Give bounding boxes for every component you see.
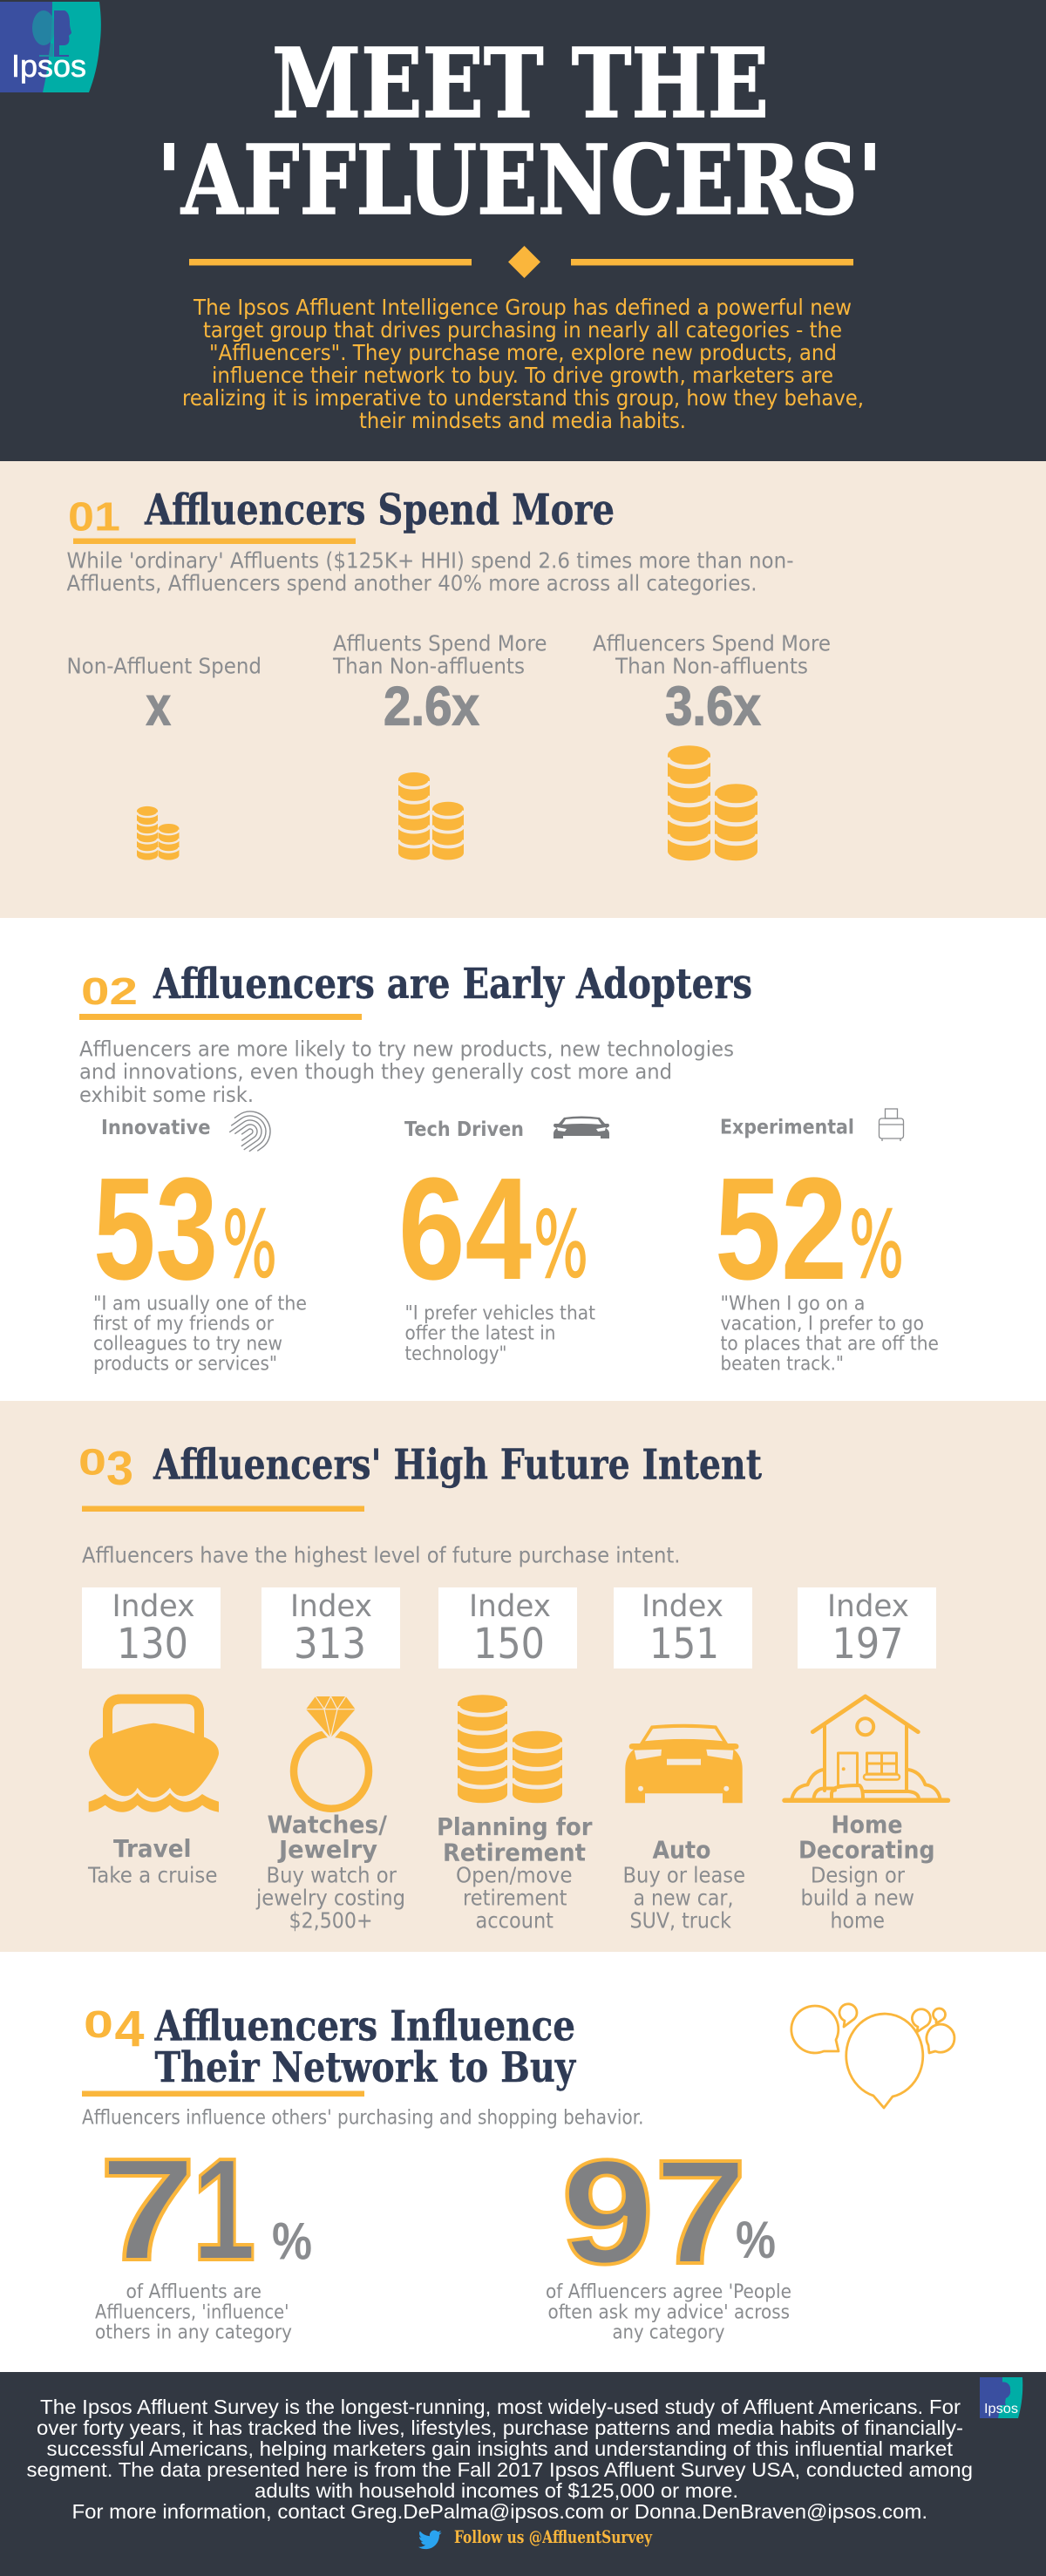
index box: jewelry (262, 1587, 400, 1669)
index box: travel: Index (112, 1589, 195, 1624)
stat: 71 percent: Affluencers, 'influence' (95, 2301, 289, 2324)
category label: watches and jewelry: $2,500+ (289, 1907, 373, 1934)
index box: home: Index (827, 1589, 909, 1624)
panel: 03 future intent (0, 1401, 1046, 1952)
stat: experimental: "When I go on a (720, 1294, 865, 1315)
footer text: For more information, contact Greg.DePalma@ipsos.com or Donna.DenBraven@ipsos.com. (71, 2500, 927, 2523)
title (157, 27, 882, 236)
column: affluents spend: Than Non-affluents (332, 654, 525, 678)
title: 'AFFLUENCERS' (157, 124, 882, 236)
description 01: While 'ordinary' Affluents ($125K+ HHI) spend 2.6 times more than non- (66, 547, 793, 574)
column: non-affluent spend: Non-Affluent Spend (66, 654, 262, 678)
category label: watches and jewelry: Watches/ (267, 1810, 388, 1839)
section number 04: 0 (84, 2003, 113, 2046)
category label: retirement: Retirement (443, 1838, 586, 1867)
panel: footer (0, 2372, 1046, 2576)
icon: house (784, 1696, 948, 1800)
panel: header (0, 0, 1046, 461)
footer text: The Ipsos Affluent Survey is the longest-running, most widely-used study of Affluent Americans. For (40, 2396, 961, 2418)
description 01: Affluents, Affluencers spend another 40% more across all categories. (66, 570, 757, 596)
stat: innovative: first of my friends or (93, 1313, 275, 1336)
title: MEET THE (272, 27, 769, 139)
heading underline 03 (82, 1506, 364, 1512)
heading 01: Affluencers Spend More (144, 485, 615, 535)
stat: 97 percent: often ask my advice' across (547, 2301, 790, 2324)
category label: auto (622, 1836, 745, 1934)
description 01 (66, 547, 793, 596)
category label: home decorating: Home (832, 1810, 903, 1839)
icon: twitter bird (418, 2530, 442, 2549)
category label: home decorating: Decorating (798, 1836, 934, 1864)
stat: innovative: products or services" (93, 1353, 277, 1376)
stat: 97 percent (546, 2130, 791, 2343)
intro text: realizing it is imperative to understand this group, how they behave, (182, 385, 864, 411)
description 02: Affluencers are more likely to try new products, new technologies (79, 1037, 734, 1062)
category label: home decorating: build a new (800, 1885, 914, 1911)
intro text: The Ipsos Affluent Intelligence Group has defined a powerful new (193, 295, 852, 320)
stat: tech driven: 64 (398, 1148, 532, 1310)
stat: innovative (93, 1104, 307, 1376)
logo: Ipsos small: Ipsos (984, 2402, 1018, 2416)
logo: Ipsos: Ipsos (11, 48, 86, 84)
stat: experimental: beaten track." (720, 1353, 844, 1376)
category label: watches and jewelry: Jewelry (277, 1835, 377, 1864)
index box: auto: 151 (649, 1620, 719, 1669)
category label: retirement: Planning for (437, 1812, 593, 1841)
section number 04 (84, 2001, 145, 2057)
stat: innovative: "I am usually one of the (93, 1294, 307, 1315)
stat: experimental: 52 (715, 1148, 847, 1310)
stat: experimental: Experimental (720, 1116, 854, 1138)
footer text: successful Americans, helping marketers gain insights and understanding of this influential market (47, 2437, 954, 2460)
category label: travel (87, 1834, 218, 1888)
heading underline 02 (79, 1014, 362, 1020)
index box: jewelry: Index (290, 1589, 372, 1624)
title divider with diamond (189, 246, 853, 278)
category label: retirement: Open/move (456, 1862, 572, 1888)
category label: auto: Auto (652, 1836, 711, 1864)
stat: tech driven (398, 1116, 609, 1365)
category label: retirement: retirement (463, 1885, 567, 1911)
stat: 97 percent: 97 (561, 2130, 747, 2295)
heading 04 (154, 2002, 577, 2092)
column: non-affluent spend (66, 654, 262, 860)
category label: travel: Take a cruise (87, 1862, 218, 1888)
category label: home decorating: home (830, 1907, 885, 1934)
stat: innovative: 53 (93, 1148, 218, 1310)
stat: 71 percent: 1 (192, 2129, 256, 2291)
stat: 71 percent (95, 2129, 312, 2343)
follow us text: Follow us @AffluentSurvey (454, 2526, 653, 2547)
icon: car (554, 1116, 609, 1138)
stat: 71 percent: of Affluents are (126, 2280, 262, 2303)
stat: innovative: Innovative (101, 1117, 211, 1139)
intro text: "Affluencers". They purchase more, explore new products, and (209, 340, 837, 365)
index box: auto (614, 1587, 752, 1669)
category label: watches and jewelry (255, 1810, 405, 1934)
description 02: exhibit some risk. (79, 1083, 254, 1107)
stat: tech driven: technology" (404, 1343, 507, 1365)
stat: 71 percent: % (272, 2212, 312, 2270)
heading 03: Affluencers' High Future Intent (153, 1440, 762, 1489)
section number 03 (78, 1441, 133, 1495)
column: affluents spend: Affluents Spend More (333, 631, 547, 656)
section number 01: 01 (68, 493, 120, 539)
footer text: adults with household incomes of $125,000 or more. (255, 2479, 738, 2502)
stat: innovative: % (222, 1192, 277, 1298)
logo: Ipsos small (980, 2377, 1022, 2418)
category label: auto: Buy or lease (622, 1862, 745, 1888)
category label: auto: a new car, (633, 1885, 734, 1911)
logo: Ipsos (0, 2, 101, 92)
description 03: Affluencers have the highest level of future purchase intent. (82, 1543, 680, 1567)
description 02: and innovations, even though they generally cost more and (79, 1060, 672, 1084)
intro text: their mindsets and media habits. (359, 408, 686, 433)
stat: innovative: colleagues to try new (93, 1334, 282, 1355)
stat: 97 percent: of Affluencers agree 'People (546, 2280, 791, 2303)
icon: fingerprint (224, 1104, 278, 1158)
column: affluencers spend: Than Non-affluents (615, 654, 808, 678)
column: affluencers spend (593, 631, 831, 860)
panel: 01 spend more (0, 461, 1046, 918)
stat: experimental (715, 1109, 939, 1376)
section number 04: 4 (115, 2001, 145, 2057)
category label: home decorating: Design or (811, 1862, 906, 1888)
stat: experimental: vacation, I prefer to go (720, 1313, 924, 1336)
category label: auto: SUV, truck (629, 1907, 731, 1934)
icon: cruise ship (89, 1699, 219, 1812)
category label: watches and jewelry: jewelry costing (255, 1885, 405, 1911)
heading 04: Their Network to Buy (155, 2043, 577, 2092)
heading underline 01 (73, 539, 356, 544)
section number 02: 02 (81, 970, 138, 1013)
index box: retirement: 150 (473, 1620, 545, 1669)
stat: 97 percent: any category (612, 2321, 725, 2343)
column: affluencers spend: Affluencers Spend More (593, 631, 831, 656)
stat: tech driven: "I prefer vehicles that (404, 1302, 595, 1325)
panel: 04 influence (0, 1952, 1046, 2372)
index box: home: 197 (832, 1620, 903, 1669)
heading 04: Affluencers Influence (154, 2002, 575, 2050)
footer text: over forty years, it has tracked the lives, lifestyles, purchase patterns and media habits of financially- (37, 2416, 963, 2439)
footer text (26, 2396, 973, 2523)
stat: 97 percent: % (736, 2211, 776, 2269)
column: non-affluent spend: x (146, 676, 171, 737)
description 02 (79, 1037, 734, 1107)
icon: coin stacks (458, 1695, 562, 1803)
column: affluencers spend: 3.6x (665, 676, 761, 737)
column: affluents spend (332, 631, 547, 860)
category label: watches and jewelry: Buy watch or (267, 1862, 397, 1888)
section number 03: 0 (78, 1442, 106, 1484)
index box: retirement (438, 1587, 577, 1669)
icon: speech bubbles (791, 2004, 954, 2108)
heading 02: Affluencers are Early Adopters (153, 960, 752, 1009)
index box: home (798, 1587, 936, 1669)
stat: experimental: % (849, 1192, 904, 1298)
stat: 71 percent: others in any category (95, 2321, 292, 2343)
stat: tech driven: Tech Driven (404, 1118, 524, 1141)
index box: jewelry: 313 (294, 1620, 366, 1669)
index box: travel: 130 (117, 1620, 188, 1669)
intro text: influence their network to buy. To drive growth, marketers are (212, 363, 833, 388)
icon: diamond ring (294, 1696, 369, 1809)
index box: auto: Index (642, 1589, 723, 1624)
stat: tech driven: % (533, 1192, 588, 1298)
intro text (182, 295, 864, 433)
index box: retirement: Index (469, 1589, 551, 1624)
icon: suitcase (879, 1109, 903, 1141)
category label: travel: Travel (113, 1834, 192, 1863)
description 04: Affluencers influence others' purchasing and shopping behavior. (82, 2106, 643, 2129)
section number 03: 3 (106, 1441, 133, 1495)
category label: retirement: account (476, 1907, 554, 1934)
index box: travel (82, 1587, 221, 1669)
category label: home decorating (798, 1810, 934, 1934)
footer text: segment. The data presented here is from the Fall 2017 Ipsos Affluent Survey USA, conducted among (26, 2458, 973, 2481)
intro text: target group that drives purchasing in nearly all categories - the (203, 317, 842, 343)
panel: 02 early adopters (0, 918, 1046, 1401)
stat: tech driven: offer the latest in (404, 1323, 556, 1344)
stat: experimental: to places that are off the (720, 1334, 939, 1355)
stat: 71 percent: 7 (99, 2129, 196, 2291)
category label: retirement (437, 1812, 593, 1934)
heading underline 04 (82, 2090, 364, 2097)
icon: car front (625, 1724, 743, 1803)
column: affluents spend: 2.6x (384, 676, 479, 737)
